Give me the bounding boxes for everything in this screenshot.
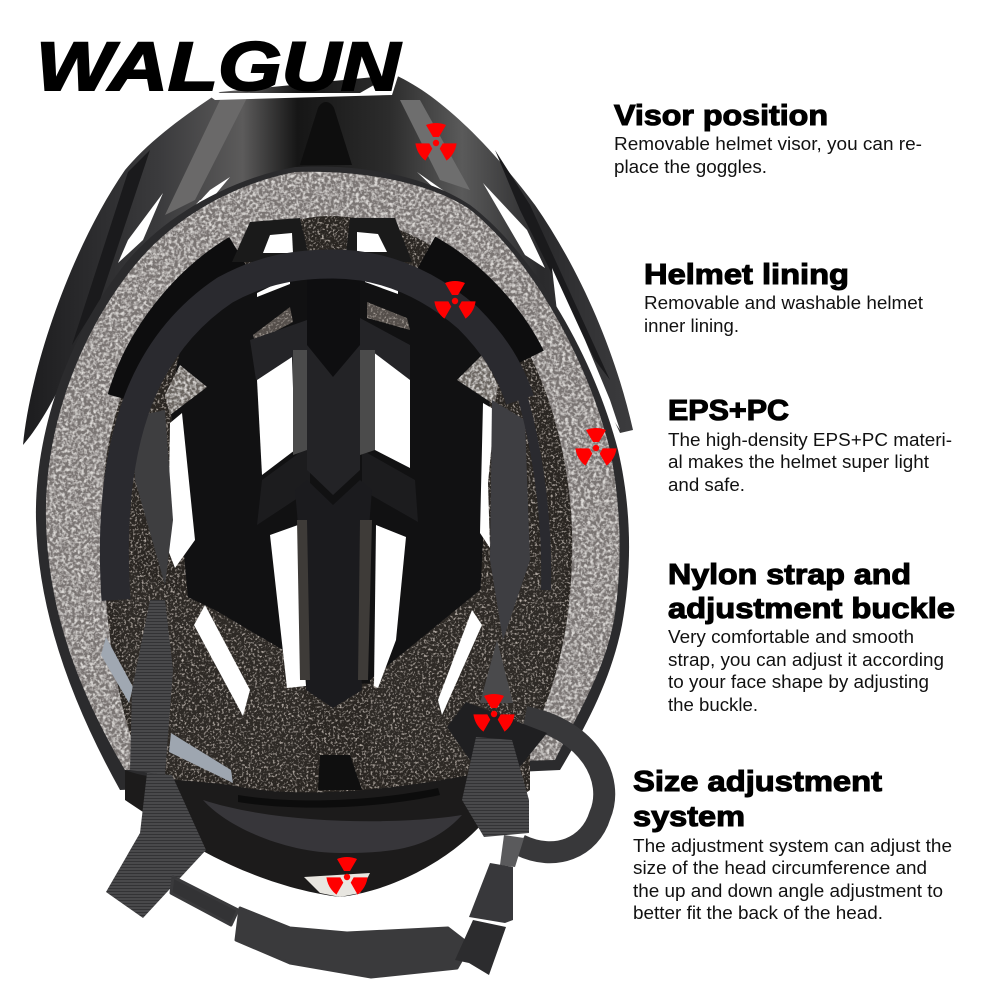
- feature: nylon strap and adjustment buckle: [668, 559, 955, 715]
- feature: size adjustment system: Size adjustment: [633, 766, 882, 798]
- marker: visor position: [414, 123, 458, 162]
- feature: helmet lining: [644, 259, 923, 336]
- feature: nylon strap and adjustment buckle: strap, you can adjust it according: [668, 650, 944, 670]
- visor: [23, 75, 633, 445]
- rear cradle: [125, 755, 500, 897]
- top rear foam vents: [232, 218, 412, 262]
- inner black padding: [165, 270, 498, 690]
- rear padded strap: [171, 877, 470, 977]
- feature: size adjustment system: [633, 766, 952, 923]
- buckle: [455, 835, 524, 975]
- feature: EPS+PC: al makes the helmet super light: [668, 452, 929, 472]
- helmet photo: [23, 75, 633, 977]
- marker: nylon strap: [472, 694, 516, 733]
- feature: helmet lining: inner lining.: [644, 316, 739, 336]
- ventilation openings: [168, 277, 495, 716]
- feature: EPS+PC: EPS+PC: [668, 395, 789, 427]
- logo: WALGUN: [36, 28, 403, 105]
- feature: helmet lining: Removable and washable helmet: [644, 293, 923, 313]
- chin strap loop right: [447, 640, 604, 852]
- chin strap left: [106, 600, 206, 918]
- feature: nylon strap and adjustment buckle: Nylon strap and: [668, 559, 911, 591]
- feature: EPS+PC: and safe.: [668, 475, 745, 495]
- feature: size adjustment system: better fit the back of the head.: [633, 903, 883, 923]
- outer shell: [36, 166, 629, 790]
- feature: nylon strap and adjustment buckle: the buckle.: [668, 695, 758, 715]
- feature: visor position: [614, 100, 922, 177]
- marker: helmet lining: [433, 281, 477, 320]
- EPS foam ring: [46, 172, 620, 770]
- lower liner foam: [110, 560, 310, 780]
- feature: size adjustment system: size of the head circumference and: [633, 858, 927, 878]
- white marks: [101, 637, 233, 783]
- feature: nylon strap and adjustment buckle: to your face shape by adjusting: [668, 672, 929, 692]
- feature: visor position: Visor position: [614, 100, 828, 132]
- marker: size adjustment: [325, 857, 369, 896]
- dark liner: [103, 216, 572, 835]
- feature: size adjustment system: the up and down angle adjustment to: [633, 881, 943, 901]
- feature: EPS+PC: The high-density EPS+PC materi-: [668, 430, 952, 450]
- centre pad column: [293, 278, 375, 708]
- inner headband: [114, 264, 546, 600]
- feature: visor position: Removable helmet visor, you can re-: [614, 134, 922, 154]
- feature: size adjustment system: system: [633, 801, 745, 833]
- feature: helmet lining: Helmet lining: [644, 259, 849, 291]
- lower liner foam right: [370, 540, 570, 770]
- feature: size adjustment system: The adjustment system can adjust the: [633, 836, 952, 856]
- feature: visor position: place the goggles.: [614, 157, 767, 177]
- feature: nylon strap and adjustment buckle: Very comfortable and smooth: [668, 627, 914, 647]
- feature: EPS+PC: [668, 395, 952, 495]
- feature: nylon strap and adjustment buckle: adjustment buckle: [668, 593, 955, 625]
- marker: EPS+PC: [574, 428, 618, 467]
- visor vents: [30, 172, 620, 440]
- shadow behind headband: [128, 255, 525, 400]
- side mesh panels: [133, 400, 530, 640]
